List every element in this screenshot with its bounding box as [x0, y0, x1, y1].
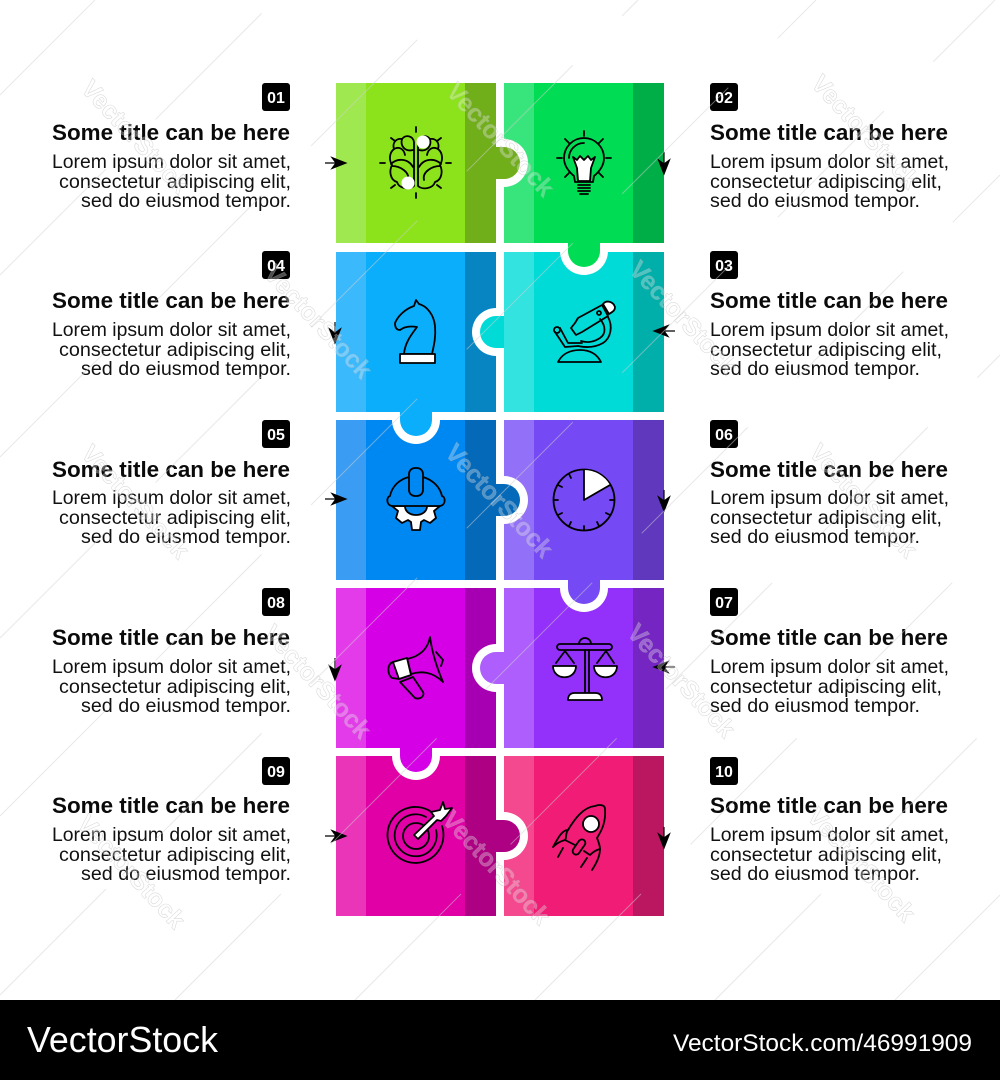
text block 07: Lorem ipsum dolor sit amet,	[710, 656, 949, 678]
arrow: piece 06	[658, 490, 670, 511]
watermark text: VectorStock	[439, 439, 559, 563]
panel: puzzle piece 09	[336, 756, 528, 916]
watermark text: VectorStock	[258, 260, 378, 384]
text block 06: Some title can be here	[710, 457, 948, 482]
text block 05: Some title can be here	[52, 457, 290, 482]
icon: microscope	[554, 302, 615, 362]
arrow: piece 07	[654, 662, 675, 672]
watermark text: VectorStock	[801, 803, 921, 927]
text block 05	[52, 420, 291, 548]
text block 06: sed do eiusmod tempor.	[710, 526, 920, 548]
text block 09: consectetur adipiscing elit,	[59, 844, 291, 866]
footer logo: VectorStock	[27, 1019, 219, 1060]
watermark text: VectorStock	[803, 439, 923, 563]
text block 03: 03	[715, 258, 733, 275]
text block 02: 02	[715, 90, 733, 107]
text block 04: Some title can be here	[52, 288, 290, 313]
arrow: into piece 01	[325, 158, 346, 168]
icon: brain	[380, 127, 451, 198]
text block 10: Some title can be here	[710, 793, 948, 818]
arrow: piece 02	[658, 152, 670, 174]
text block 04: consectetur adipiscing elit,	[59, 339, 291, 361]
text block 01: Some title can be here	[52, 120, 290, 145]
text block 01	[52, 83, 291, 212]
text block 09: sed do eiusmod tempor.	[81, 863, 291, 885]
text block 08: consectetur adipiscing elit,	[59, 676, 291, 698]
footer url: VectorStock.com/46991909	[673, 1030, 972, 1057]
text block 08: Lorem ipsum dolor sit amet,	[52, 656, 291, 678]
text block 08: sed do eiusmod tempor.	[81, 695, 291, 717]
text block 04	[52, 251, 291, 380]
text block 02: consectetur adipiscing elit,	[710, 171, 942, 193]
text block 10: sed do eiusmod tempor.	[710, 863, 920, 885]
panel: puzzle piece 05	[336, 420, 528, 580]
panel: puzzle piece 07	[472, 588, 664, 748]
panel: puzzle piece 03	[472, 252, 664, 412]
panel: puzzle piece 01	[336, 83, 528, 243]
icon: helmet and gear	[387, 468, 445, 530]
text block 09: Lorem ipsum dolor sit amet,	[52, 824, 291, 846]
text block 02: sed do eiusmod tempor.	[710, 190, 920, 212]
panel: puzzle piece 02	[504, 83, 664, 275]
panel: puzzle piece 06	[504, 420, 664, 612]
text block 07: consectetur adipiscing elit,	[710, 676, 942, 698]
text block 03: Some title can be here	[710, 288, 948, 313]
text block 04: 04	[267, 258, 285, 275]
watermark text: VectorStock	[805, 70, 925, 194]
text block 06: 06	[715, 427, 733, 444]
text block 03: sed do eiusmod tempor.	[710, 358, 920, 380]
panel: puzzle piece 10	[504, 756, 664, 916]
text block 07: Some title can be here	[710, 625, 948, 650]
text block 08: Some title can be here	[52, 625, 290, 650]
icon: chess knight	[395, 300, 435, 363]
icon: megaphone	[388, 637, 443, 699]
text block 08	[52, 588, 291, 717]
text block 03	[710, 251, 949, 380]
arrow: piece 03	[654, 326, 675, 336]
icon: balance scales	[553, 638, 617, 700]
icon: light bulb	[557, 131, 611, 194]
text block 03: Lorem ipsum dolor sit amet,	[710, 319, 949, 341]
text block 09	[52, 757, 291, 885]
arrow: piece 09	[325, 830, 346, 842]
arrow: piece 08	[330, 658, 340, 680]
watermark text: VectorStock	[623, 256, 743, 380]
text block 06: consectetur adipiscing elit,	[710, 507, 942, 529]
panel: puzzle piece 08	[336, 588, 496, 780]
arrow: piece 05	[325, 494, 346, 504]
text block 08: 08	[267, 595, 285, 612]
watermark text: VectorStock	[71, 810, 191, 934]
text block 05: consectetur adipiscing elit,	[59, 507, 291, 529]
arrow: piece 10	[658, 827, 670, 848]
text block 10: 10	[715, 764, 733, 781]
panel: puzzle piece 04	[336, 252, 496, 444]
watermark text: VectorStock	[440, 78, 560, 202]
text block 01: sed do eiusmod tempor.	[81, 190, 291, 212]
text block 10	[710, 757, 949, 885]
text block 01: consectetur adipiscing elit,	[59, 171, 291, 193]
text block 01: 01	[267, 90, 285, 107]
text block 03: consectetur adipiscing elit,	[710, 339, 942, 361]
watermark text: VectorStock	[75, 440, 195, 564]
text block 09: Some title can be here	[52, 793, 290, 818]
text block 09: 09	[267, 764, 285, 781]
icon: target with arrow	[387, 802, 452, 863]
watermark text: VectorStock	[621, 619, 741, 743]
text block 02: Lorem ipsum dolor sit amet,	[710, 151, 949, 173]
text block 07: sed do eiusmod tempor.	[710, 695, 920, 717]
text block 05: Lorem ipsum dolor sit amet,	[52, 487, 291, 509]
icon: rocket	[553, 805, 605, 870]
arrow: piece 04	[330, 322, 340, 343]
text block 07: 07	[715, 595, 733, 612]
text block 05: 05	[267, 427, 285, 444]
text block 07	[710, 588, 949, 717]
watermark text: VectorStock	[257, 620, 377, 744]
text block 10: consectetur adipiscing elit,	[710, 844, 942, 866]
watermark text	[71, 70, 925, 934]
watermark text: VectorStock	[436, 806, 556, 930]
icon: clock with wedge	[554, 470, 614, 530]
text block 04: Lorem ipsum dolor sit amet,	[52, 319, 291, 341]
footer bar	[0, 1000, 1000, 1080]
text block 06	[710, 420, 949, 548]
text block 10: Lorem ipsum dolor sit amet,	[710, 824, 949, 846]
text block 06: Lorem ipsum dolor sit amet,	[710, 487, 949, 509]
text block 01: Lorem ipsum dolor sit amet,	[52, 151, 291, 173]
text block 04: sed do eiusmod tempor.	[81, 358, 291, 380]
text block 02	[710, 83, 949, 212]
text block 05: sed do eiusmod tempor.	[81, 526, 291, 548]
text block 02: Some title can be here	[710, 120, 948, 145]
watermark text: VectorStock	[75, 75, 195, 199]
